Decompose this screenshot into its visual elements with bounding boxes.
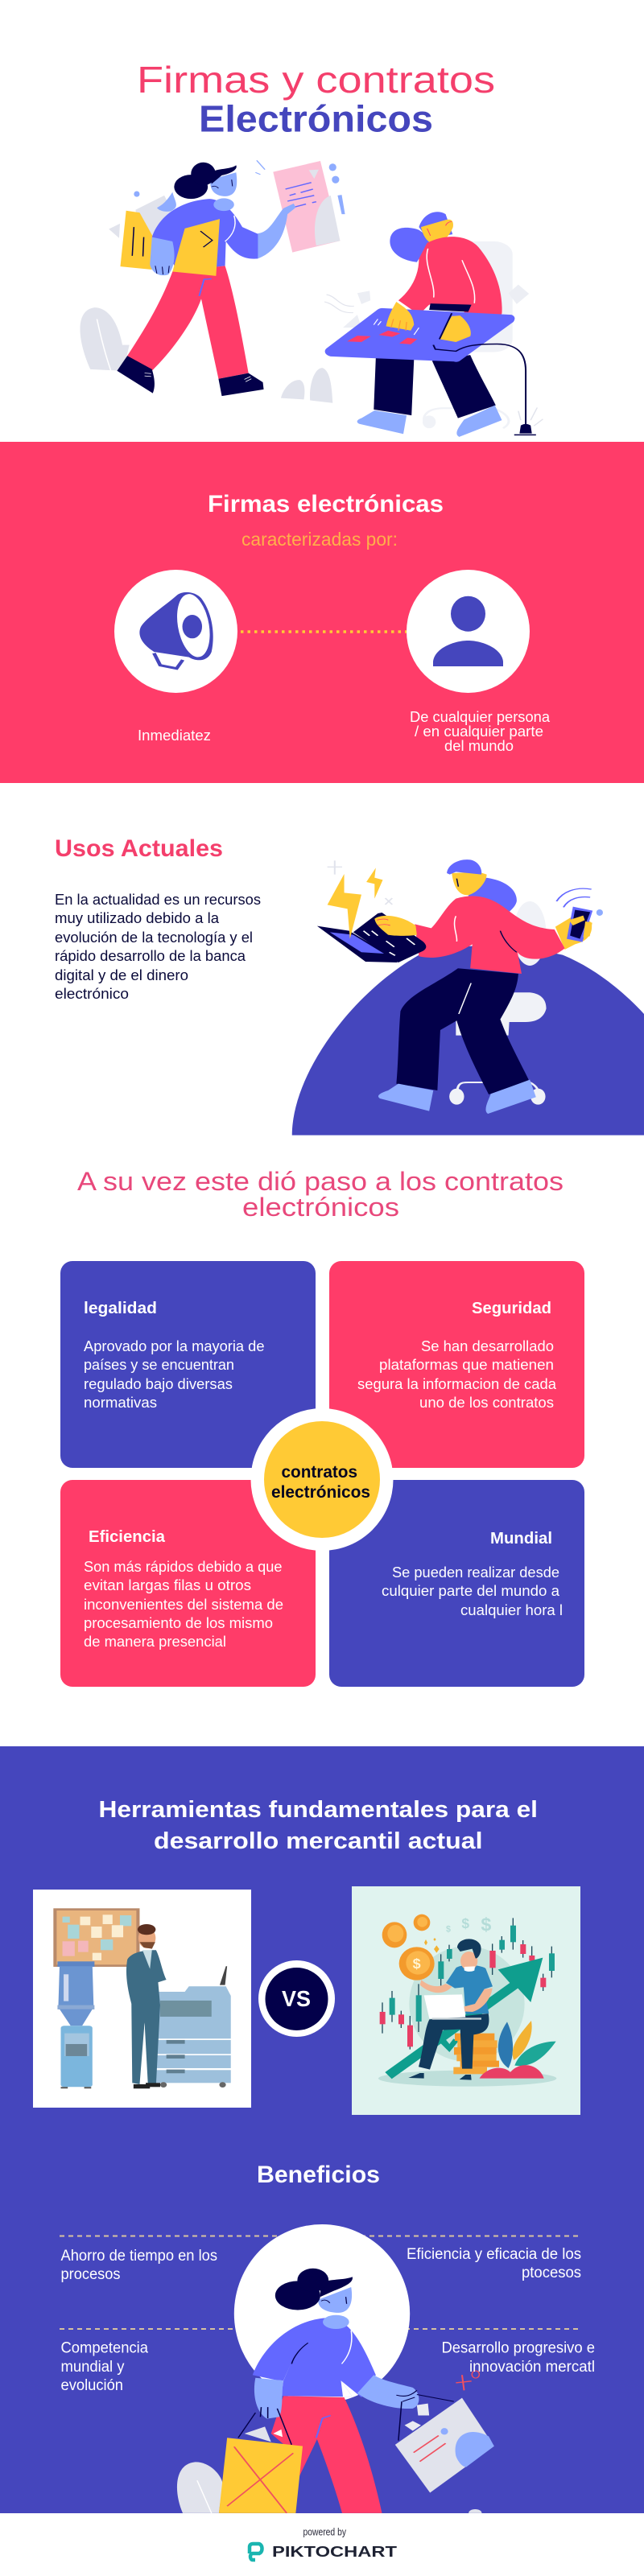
illustration: person walking with folder and paper bbox=[80, 160, 345, 403]
benefit: competencia mundial: Competencia bbox=[61, 2340, 148, 2356]
label: de cualquier persona: / en cualquier parte bbox=[415, 723, 543, 740]
footer: piktochart logo: PIKTOCHART bbox=[272, 2544, 397, 2560]
label: de cualquier persona: del mundo bbox=[444, 738, 514, 754]
text block: usos actuales: muy utilizado debido a la bbox=[55, 910, 220, 926]
card: legalidad: regulado bajo diversas bbox=[84, 1376, 233, 1392]
card: eficiencia: Son más rápidos debido a que bbox=[84, 1559, 282, 1575]
benefit: eficiencia y eficacia bbox=[407, 2246, 581, 2281]
center badge: contratos electrónicos: contratos bbox=[282, 1463, 357, 1482]
benefit: desarrollo progresivo: innovación mercatl bbox=[469, 2359, 595, 2376]
benefit: competencia mundial bbox=[61, 2340, 148, 2394]
card: seguridad bbox=[329, 1261, 584, 1468]
badge: vs bbox=[258, 1960, 335, 2037]
card: mundial bbox=[329, 1480, 584, 1687]
stacked coins bbox=[455, 2034, 494, 2041]
title bbox=[137, 59, 495, 140]
dashed dividers bbox=[60, 2236, 581, 2329]
arrow bbox=[385, 1958, 543, 2079]
card: legalidad: Aprovado por la mayoria de bbox=[84, 1338, 264, 1354]
card: legalidad bbox=[60, 1261, 316, 1468]
benefit: ahorro de tiempo: Ahorro de tiempo en los bbox=[61, 2248, 217, 2265]
card: mundial: culquier parte del mundo a bbox=[382, 1583, 560, 1599]
illustration: investor with rising chart bbox=[352, 1886, 580, 2115]
footer: piktochart logo: powered by bbox=[303, 2525, 346, 2538]
card: eficiencia: de manera presencial bbox=[84, 1634, 226, 1650]
center badge: contratos electrónicos bbox=[251, 1408, 393, 1551]
text block: usos actuales: evolución de la tecnología y el bbox=[55, 929, 253, 946]
subheading: caracterizadas por: bbox=[242, 529, 398, 550]
heading: contratos electrónicos: electrónicos bbox=[242, 1193, 399, 1222]
illustration: investor with rising chart: $ bbox=[481, 1914, 491, 1935]
candlesticks bbox=[390, 1918, 555, 2032]
card: eficiencia bbox=[60, 1480, 316, 1687]
heading: beneficios: Beneficios bbox=[257, 2162, 380, 2188]
benefit: eficiencia y eficacia: ptocesos bbox=[522, 2265, 581, 2281]
panel: firmas electrónicas bbox=[0, 442, 644, 783]
label: inmediatez: Inmediatez bbox=[138, 727, 211, 744]
coins bbox=[382, 1922, 407, 1947]
card: eficiencia: Eficiencia bbox=[89, 1528, 166, 1546]
benefit: competencia mundial: evolución bbox=[61, 2377, 123, 2394]
benefit: eficiencia y eficacia: Eficiencia y eficacia de los bbox=[407, 2246, 581, 2263]
icon: piktochart mark bbox=[250, 2544, 262, 2560]
card: seguridad: plataformas que matienen bbox=[379, 1357, 554, 1373]
illustration: seated person with tablet bbox=[324, 212, 543, 437]
illustration: investor with rising chart: $ bbox=[461, 1915, 469, 1931]
benefit: ahorro de tiempo bbox=[61, 2248, 217, 2283]
label: de cualquier persona: De cualquier persona bbox=[410, 709, 551, 725]
card: legalidad: países y se encuentran bbox=[84, 1357, 234, 1373]
connector dots bbox=[241, 630, 407, 633]
text block: usos actuales: rápido desarrollo de la banca bbox=[55, 948, 246, 964]
illustration: person on blue dome with laptop and phone bbox=[292, 859, 644, 1136]
heading: contratos electrónicos: A su vez este dió paso a los contratos bbox=[77, 1167, 564, 1196]
label: de cualquier persona bbox=[410, 709, 551, 754]
illustration: person with shopping bags bbox=[177, 2224, 494, 2513]
illustration: investor with rising chart: $ bbox=[446, 1925, 451, 1935]
text block: usos actuales: electrónico bbox=[55, 986, 129, 1002]
heading: Firmas electrónicas bbox=[208, 491, 444, 517]
benefit: desarrollo progresivo bbox=[441, 2340, 595, 2376]
card: legalidad: legalidad bbox=[84, 1300, 157, 1317]
center badge: contratos electrónicos: electrónicos bbox=[271, 1483, 370, 1502]
footer: piktochart logo bbox=[250, 2525, 397, 2560]
heading: herramientas bbox=[98, 1797, 538, 1854]
card: eficiencia: procesamiento de los mismo bbox=[84, 1615, 273, 1631]
icon: megaphone bbox=[114, 570, 237, 693]
text block: usos actuales: digital y de el dinero bbox=[55, 967, 188, 983]
badge: vs: VS bbox=[282, 1986, 311, 2011]
person bbox=[419, 2013, 489, 2070]
benefit: ahorro de tiempo: procesos bbox=[61, 2266, 121, 2283]
card: seguridad: segura la informacion de cada bbox=[357, 1376, 557, 1392]
card: eficiencia: inconvenientes del sistema de bbox=[84, 1597, 283, 1613]
heading: usos actuales: Usos Actuales bbox=[55, 835, 223, 862]
card: legalidad: normativas bbox=[84, 1395, 157, 1411]
card: mundial: Se pueden realizar desde bbox=[392, 1564, 559, 1581]
illustration: office worker with copier bbox=[33, 1890, 251, 2108]
heading: contratos electrónicos bbox=[77, 1167, 564, 1222]
card: seguridad: Se han desarrollado bbox=[421, 1338, 554, 1354]
card: seguridad: uno de los contratos bbox=[419, 1395, 554, 1411]
text block: usos actuales: En la actualidad es un recursos bbox=[55, 892, 261, 908]
panel: herramientas y beneficios bbox=[0, 1746, 644, 2513]
benefit: competencia mundial: mundial y bbox=[61, 2359, 125, 2376]
plants bbox=[498, 2022, 513, 2068]
illustration: investor with rising chart: $ bbox=[413, 1956, 421, 1972]
icon: person bbox=[407, 570, 530, 693]
heading: herramientas: desarrollo mercantil actual bbox=[154, 1828, 483, 1854]
card: eficiencia: evitan largas filas u otros bbox=[84, 1577, 251, 1593]
text block: usos actuales bbox=[55, 892, 261, 1002]
benefit: desarrollo progresivo: Desarrollo progresivo e bbox=[441, 2340, 595, 2356]
card: seguridad: Seguridad bbox=[472, 1300, 551, 1317]
card: mundial: cualquier hora l bbox=[460, 1602, 563, 1618]
title: Firmas y contratos bbox=[137, 59, 495, 101]
title: Electrónicos bbox=[199, 98, 433, 140]
card: mundial: Mundial bbox=[490, 1530, 552, 1548]
heading: herramientas: Herramientas fundamentales para el bbox=[98, 1797, 538, 1823]
